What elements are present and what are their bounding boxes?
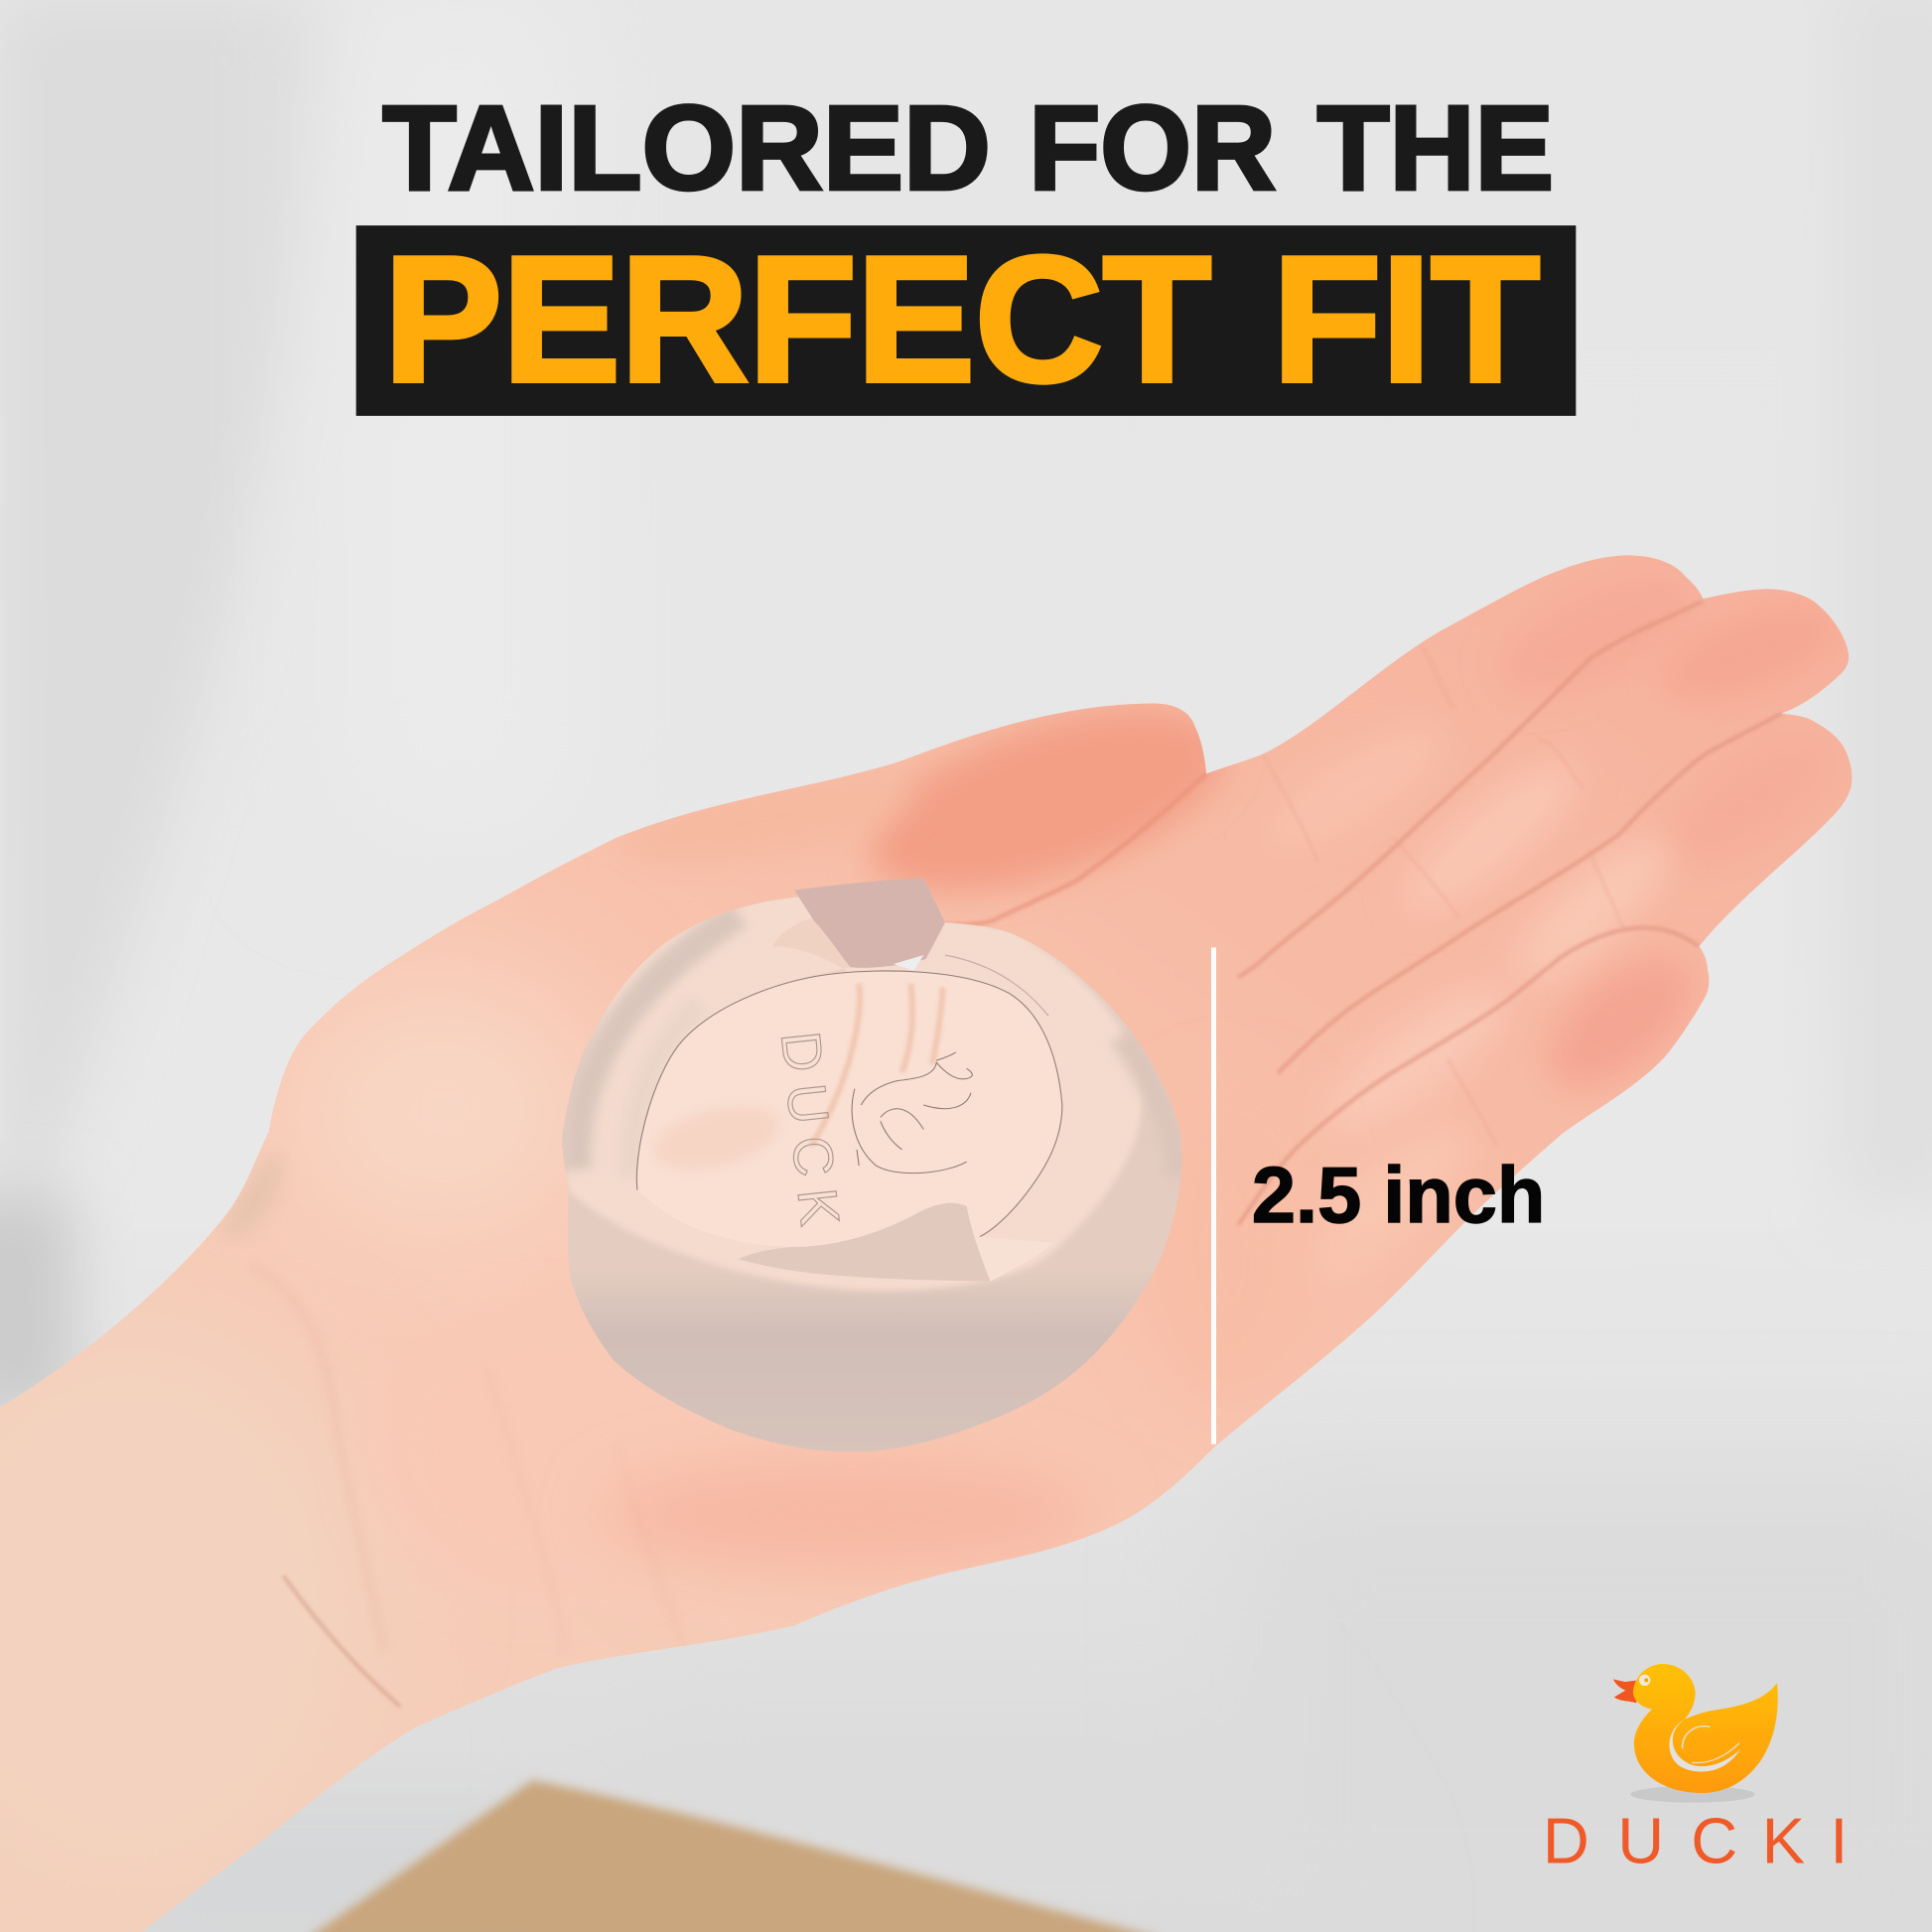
title line: THE [1317,81,1554,215]
top notch tab [794,878,945,968]
finger creases [945,773,1207,926]
coaster disc outline [636,971,1062,1237]
cardboard box [305,1780,1171,1932]
coaster shapes [562,878,1181,1451]
title line: FOR [1029,81,1276,215]
headline banner: PERFECT [384,219,1211,419]
clear furniture coaster in palm [562,878,1181,1451]
embossed duck outline [852,1052,972,1173]
duck body [1633,1664,1778,1793]
measurement line [1211,947,1216,1445]
coaster clipped shading [565,895,1177,1291]
brand wordmark: DUCKI [1543,1805,1848,1877]
wrist creases [252,1264,384,1651]
duck beak [1613,1679,1636,1703]
logo shadow [1630,1786,1755,1803]
knuckle creases [1449,884,1616,1063]
hand [0,552,1852,1932]
embossed brand text: DUCK [769,1029,852,1229]
coaster centre disc [636,971,1062,1247]
coaster body [562,878,1181,1451]
duck wing highlight [1669,1720,1740,1771]
coaster rim [565,895,1144,1291]
headline banner [356,219,1576,419]
title line [382,81,1554,215]
bottom notch tab [739,1203,990,1282]
coaster right edge shade [1122,1036,1177,1177]
headline banner: FIT [1273,219,1540,419]
duck eye [1639,1675,1650,1686]
coaster shaded rim arc [576,914,739,1170]
measurement label: 2.5 inch [1252,1151,1545,1239]
brand logo [1543,1664,1848,1877]
title line: TAILORED [382,81,991,215]
